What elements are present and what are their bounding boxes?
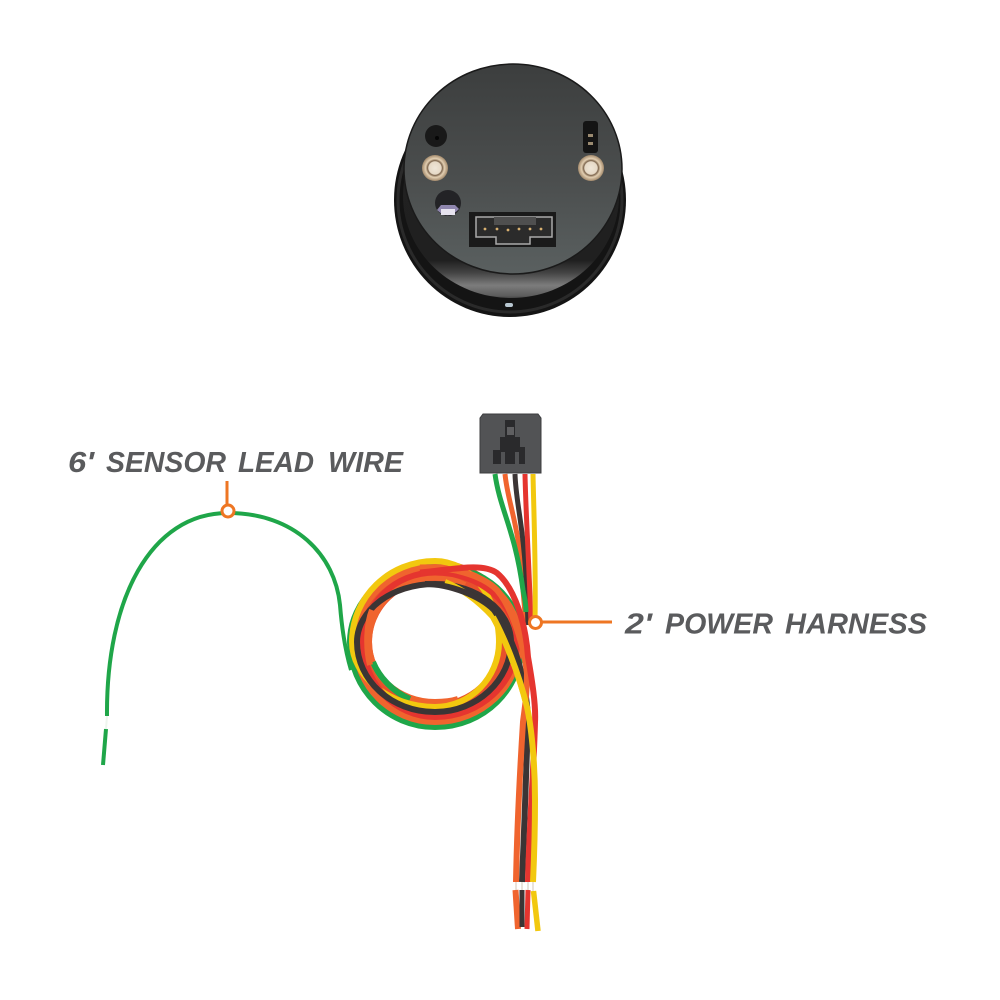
red harness wire	[525, 474, 531, 625]
yellow harness wire	[533, 474, 535, 620]
red coil strand	[363, 572, 517, 717]
gauge body cylinder	[403, 94, 619, 298]
tail: orange wire	[420, 567, 527, 882]
black coil strand	[357, 584, 511, 712]
rear power connector socket	[469, 212, 556, 247]
tail: red wire	[420, 567, 535, 882]
green sensor lead wire	[103, 513, 351, 765]
heading: power harness label: HARNESS	[785, 608, 927, 640]
harness plug connector	[480, 414, 541, 473]
heading: sensor lead wire label	[68, 447, 404, 479]
bezel rim highlight	[398, 88, 622, 312]
icon: right brass terminal	[578, 155, 604, 181]
wire coil	[350, 561, 522, 727]
gauge back	[394, 64, 626, 317]
callout: power harness marker	[530, 616, 612, 628]
gauge bezel	[394, 83, 626, 317]
heading: sensor lead wire label: LEAD	[238, 447, 314, 479]
re-laid orange strand on left side	[367, 610, 372, 665]
icon: upper left adjustment hole	[425, 125, 447, 147]
gauge rear face	[404, 64, 622, 274]
tail: black wire	[425, 584, 528, 882]
coil base layer	[361, 571, 509, 713]
heading: sensor lead wire label: WIRE	[328, 447, 404, 479]
stripped wire ends	[516, 882, 538, 931]
heading: sensor lead wire label: 6'	[68, 447, 95, 479]
icon: lower left adjustment hole	[435, 190, 461, 216]
heading: power harness label	[624, 608, 927, 640]
tail: yellow wire start	[445, 582, 527, 707]
heading: power harness label: 2'	[624, 608, 653, 640]
icon: left brass terminal	[422, 155, 448, 181]
callout: sensor lead marker	[222, 481, 234, 517]
tail: yellow wire crossing	[493, 617, 535, 882]
heading: power harness label: POWER	[665, 608, 773, 640]
heading: sensor lead wire label: SENSOR	[106, 447, 226, 479]
inner orange coil strand	[369, 578, 465, 702]
orange harness wire	[505, 474, 526, 625]
inner green coil strand	[373, 662, 410, 699]
yellow coil strand	[352, 561, 499, 707]
black harness wire	[515, 474, 528, 625]
green harness wire	[495, 474, 526, 612]
green coil strand	[350, 565, 522, 727]
bezel notch	[505, 303, 513, 307]
icon: pin header slot	[583, 121, 598, 153]
harness connector wires	[420, 474, 535, 882]
outer orange coil strand	[355, 567, 520, 722]
